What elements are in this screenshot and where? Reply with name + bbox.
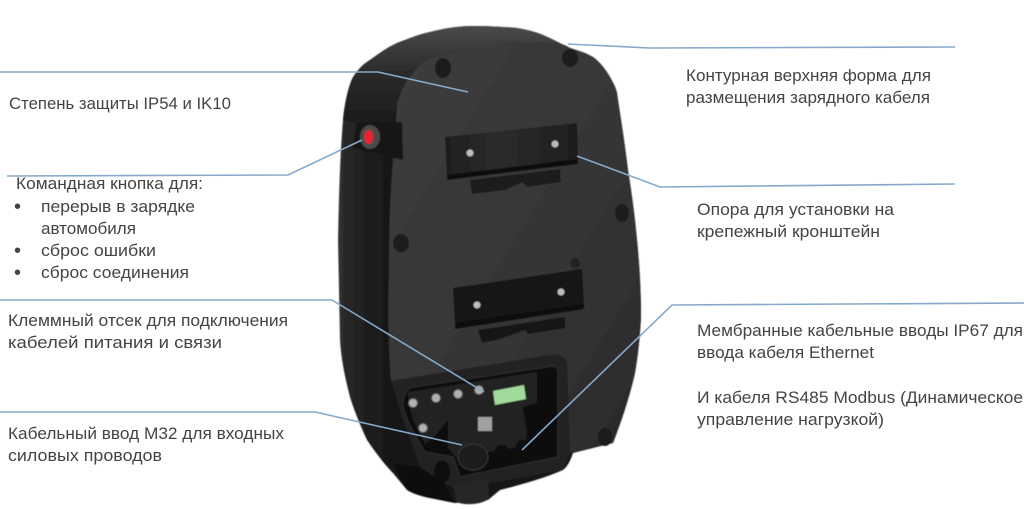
green terminal block bbox=[493, 385, 526, 405]
text: protection rating: Степень защиты IP54 и IK10 bbox=[9, 95, 231, 113]
stud panel bbox=[408, 372, 537, 457]
text block: membrane glands: И кабеля RS485 Modbus (Динамическое bbox=[697, 389, 1023, 407]
text block: command button: • bbox=[14, 240, 21, 262]
text block: M32 gland bbox=[8, 425, 285, 465]
text block: contoured top: Контурная верхняя форма для bbox=[686, 67, 931, 85]
leader line: command button bbox=[7, 140, 362, 176]
text block: membrane glands: Мембранные кабельные вводы IP67 для bbox=[697, 322, 1023, 340]
text block: terminal compartment: Клеммный отсек для подключения bbox=[8, 312, 288, 330]
terminal studs bbox=[408, 386, 484, 432]
leader line: M32 gland bbox=[0, 412, 462, 445]
text block: command button: сброс соединения bbox=[41, 264, 189, 282]
gasket bbox=[403, 366, 558, 477]
terminal compartment bbox=[391, 355, 570, 504]
text block: M32 gland: Кабельный ввод M32 для входных bbox=[8, 425, 285, 443]
red command button bbox=[353, 122, 403, 160]
lower mounting bracket bbox=[453, 269, 584, 343]
small label bbox=[478, 417, 492, 431]
text block: bracket support bbox=[697, 201, 895, 241]
text block: membrane glands: ввода кабеля Ethernet bbox=[697, 344, 874, 362]
bottom connector bbox=[453, 479, 489, 504]
leader line: contoured top bbox=[568, 44, 955, 48]
text block: command button bbox=[14, 175, 203, 284]
charger device bbox=[338, 26, 641, 504]
text block: terminal compartment bbox=[8, 312, 288, 352]
text block: command button: сброс ошибки bbox=[41, 242, 156, 260]
text block: command button: • bbox=[14, 262, 21, 284]
compartment rim bbox=[391, 355, 570, 489]
upper mounting bracket bbox=[445, 123, 578, 194]
text block: bracket support: крепежный кронштейн bbox=[697, 223, 880, 241]
device body silhouette bbox=[338, 26, 641, 503]
text block: command button: • bbox=[14, 196, 21, 218]
rear face panel bbox=[388, 42, 641, 453]
text block: command button: Командная кнопка для: bbox=[16, 175, 203, 193]
top contour bbox=[343, 26, 562, 123]
text block: command button: перерыв в зарядке bbox=[41, 198, 195, 216]
leader line: protection rating bbox=[0, 72, 468, 92]
text block: contoured top: размещения зарядного кабеля bbox=[686, 89, 930, 107]
M32 cable gland bbox=[458, 444, 488, 470]
text block: contoured top bbox=[686, 67, 931, 107]
text block: M32 gland: силовых проводов bbox=[8, 447, 162, 465]
leader line: terminal compartment bbox=[0, 300, 484, 392]
text block: membrane glands: управление нагрузкой) bbox=[697, 411, 884, 429]
text block: command button: автомобиля bbox=[41, 220, 136, 238]
undercut shadow bbox=[393, 463, 455, 503]
text block: terminal compartment: кабелей питания и связи bbox=[8, 334, 222, 352]
text block: bracket support: Опора для установки на bbox=[697, 201, 895, 219]
text block: membrane glands bbox=[697, 322, 1023, 429]
leader line: membrane glands bbox=[522, 303, 1024, 450]
leader line: bracket support bbox=[577, 156, 955, 187]
mounting holes bbox=[393, 49, 629, 446]
